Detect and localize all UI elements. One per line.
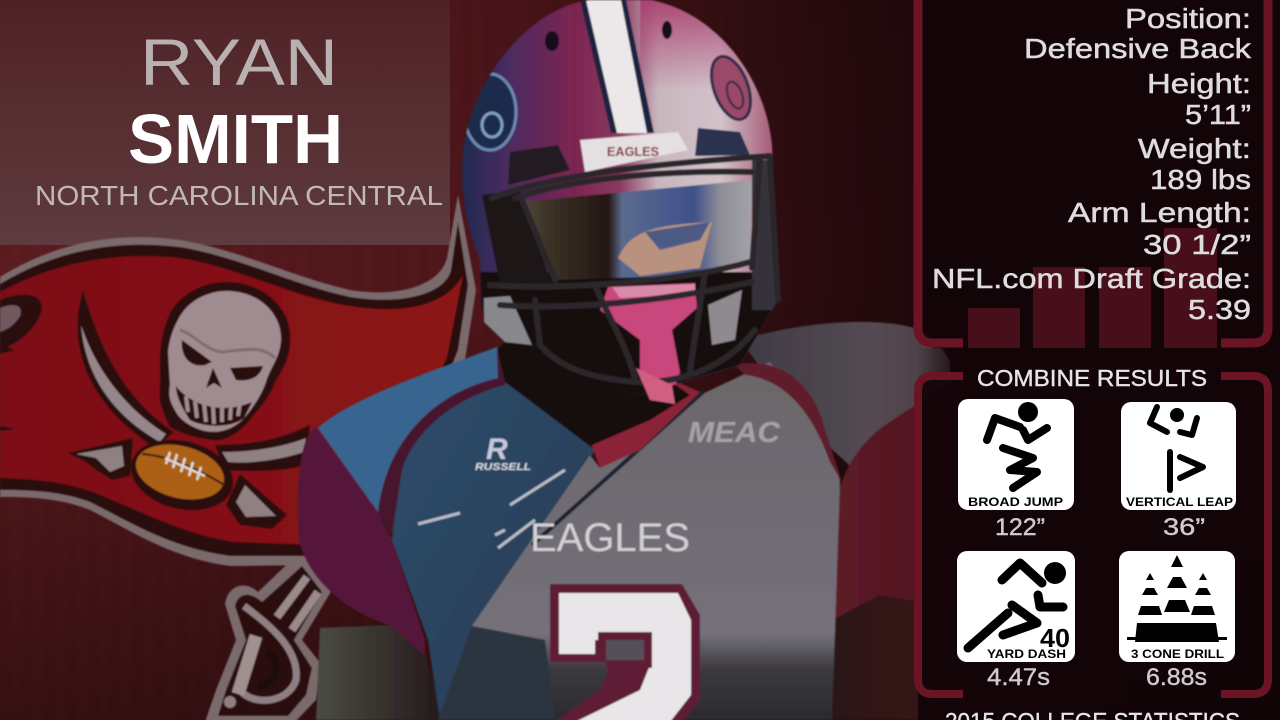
- helmet: [462, 0, 780, 404]
- right shoulder trim: [735, 363, 842, 482]
- blue shoulder: [318, 347, 498, 512]
- icon: broad jump: [958, 399, 1074, 510]
- measurement text: Position:: [1125, 3, 1251, 34]
- helmet nameplate: [580, 132, 688, 172]
- frame: [918, 376, 1268, 694]
- right sword: [215, 425, 310, 529]
- facemask: [490, 156, 778, 382]
- icon: 3 cone drill: [1119, 551, 1235, 662]
- right helmet hardware: [752, 160, 778, 310]
- left helmet shadow: [482, 190, 552, 285]
- measurement text: 189 lbs: [1150, 164, 1251, 195]
- jersey marks: [418, 470, 565, 548]
- helmet decal right: [709, 54, 753, 122]
- player photo: [298, 0, 965, 720]
- flag dark edge: [0, 222, 468, 556]
- value: broad jump: 122”: [995, 514, 1045, 541]
- Buccaneers flag logo: [0, 195, 476, 720]
- visor: [520, 180, 752, 280]
- skull: [159, 282, 290, 440]
- section heading: COMBINE RESULTS: [977, 365, 1207, 391]
- Russell logo: RUSSELL: [475, 462, 531, 473]
- jersey number: [550, 584, 700, 720]
- left flag tail mark: [0, 295, 42, 350]
- helmet decal left: [464, 74, 516, 150]
- first name: RYAN: [140, 25, 338, 99]
- left arm: [316, 625, 445, 720]
- chin strap: [636, 368, 675, 404]
- MEAC logo: MEAC: [688, 417, 781, 449]
- measurement text: [932, 3, 1252, 325]
- measurement text: Arm Length:: [1068, 197, 1251, 228]
- left sword: [68, 290, 174, 480]
- measurement text: NFL.com Draft Grade:: [932, 263, 1251, 294]
- icon: 40 yard dash: 40: [1040, 623, 1070, 653]
- football: [123, 429, 241, 521]
- lower sword hilt: [205, 552, 332, 720]
- college: NORTH CAROLINA CENTRAL: [35, 180, 443, 211]
- helmet vents: [545, 31, 559, 51]
- chest diagonal trim: [532, 392, 703, 545]
- icon: broad jump: BROAD JUMP: [968, 495, 1063, 509]
- mouthpiece: [600, 283, 697, 396]
- measurement text: Height:: [1147, 68, 1251, 99]
- helmet centre stripe: [580, 0, 654, 133]
- value: 3 cone drill: 6.88s: [1146, 664, 1207, 691]
- stats panel backdrop: [918, 0, 1280, 720]
- last name: SMITH: [128, 100, 343, 178]
- measurement text: 30 1/2”: [1143, 229, 1251, 260]
- icon: vertical leap: VERTICAL LEAP: [1126, 495, 1233, 509]
- icon: 40 yard dash: YARD DASH: [987, 647, 1066, 661]
- value: vertical leap: 36”: [1163, 514, 1205, 541]
- lower face dark: [470, 272, 780, 397]
- jersey name: EAGLES: [530, 516, 690, 560]
- value: 40 yard dash: 4.47s: [987, 664, 1050, 691]
- vent pads: [508, 145, 570, 185]
- helmet shell: [462, 0, 778, 395]
- right sleeve: [832, 372, 965, 625]
- measurement text: 5.39: [1188, 294, 1251, 325]
- measurement text: 5’11”: [1185, 99, 1251, 130]
- frame: [918, 0, 1268, 343]
- decorative grade bars: [968, 228, 1217, 348]
- flag outline: [0, 195, 476, 566]
- panel: player measurements: [918, 0, 1268, 348]
- maroon shoulder trim: [378, 347, 512, 535]
- far right shoulder: [740, 322, 956, 475]
- torso grey panel: [440, 362, 840, 720]
- neck shadow: [498, 320, 690, 446]
- header band: [0, 0, 450, 245]
- shell highlight: [640, 0, 750, 84]
- icon: vertical leap: [1121, 402, 1236, 510]
- helmet nameplate: EAGLES: [607, 144, 659, 159]
- mask reflection: [708, 290, 742, 345]
- icon: 3 cone drill: 3 CONE DRILL: [1131, 647, 1224, 661]
- measurement text: Weight:: [1138, 133, 1251, 164]
- panel: combine results: [918, 365, 1268, 694]
- chin pad: [484, 296, 532, 345]
- measurement text: Defensive Back: [1024, 33, 1252, 64]
- blue lower shading: [438, 626, 555, 720]
- player name: [35, 25, 443, 211]
- left sleeve: [298, 426, 425, 655]
- torso blue panel: [392, 382, 595, 720]
- flag red field: [0, 256, 463, 545]
- icon: 40 yard dash: [957, 551, 1075, 662]
- collar: [590, 370, 700, 468]
- Russell logo: [475, 433, 531, 473]
- Russell logo: R: [486, 433, 508, 466]
- right forearm: [832, 595, 965, 720]
- reflected nose: [618, 222, 712, 276]
